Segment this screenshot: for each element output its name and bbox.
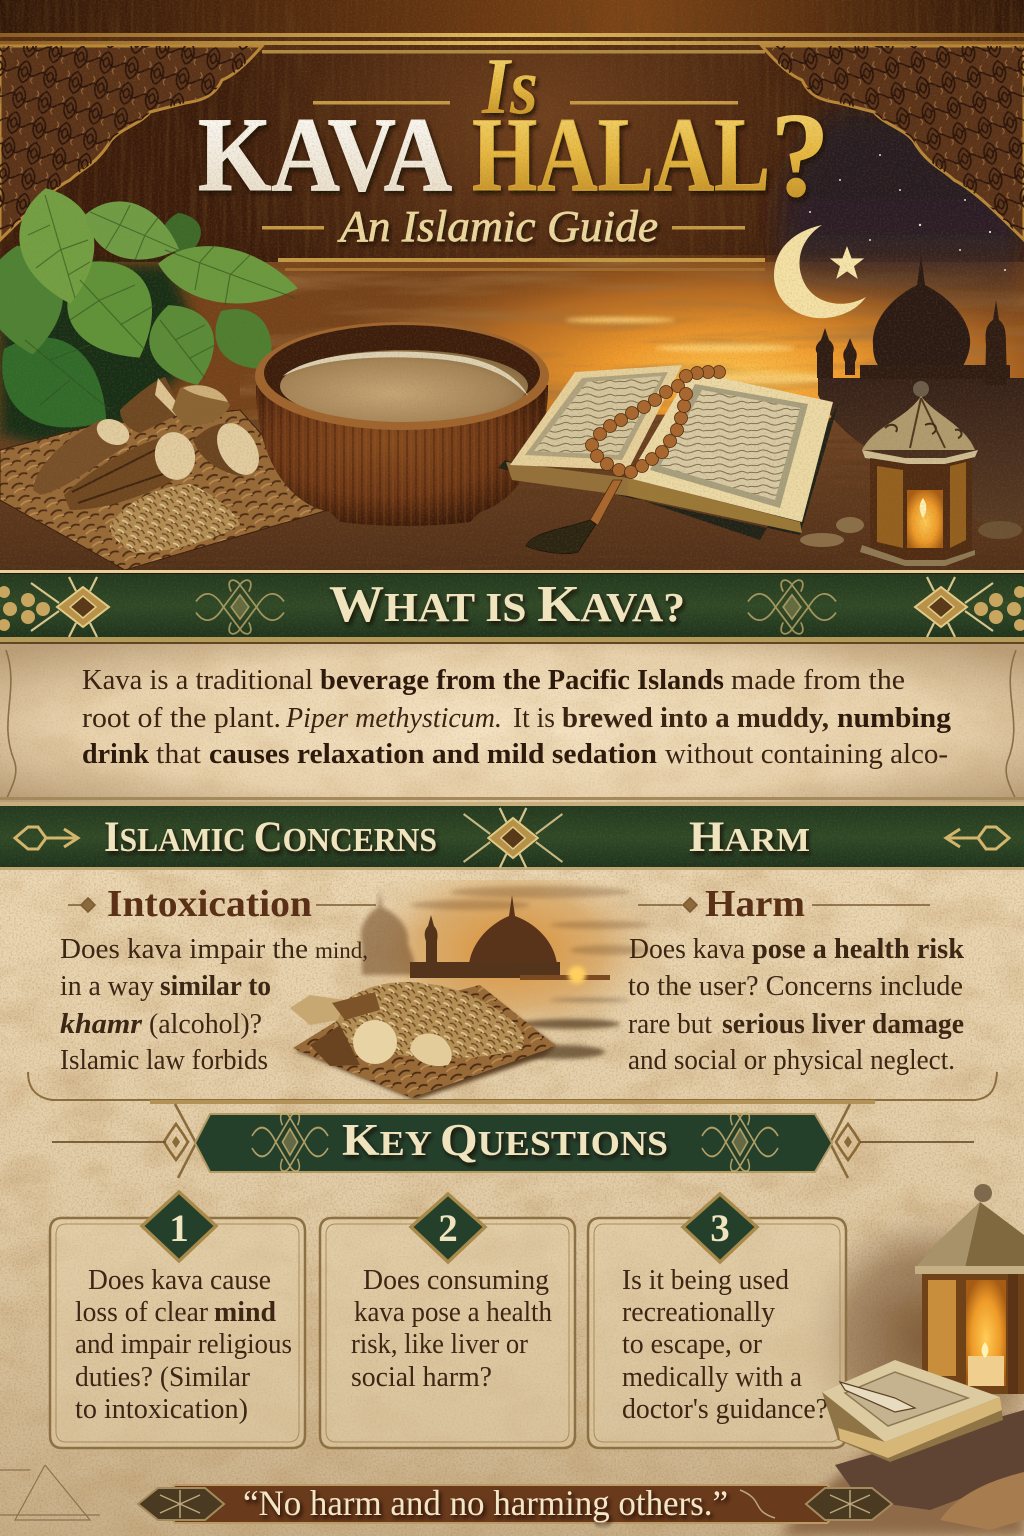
card 1 bbox=[50, 1192, 305, 1448]
heading: Harm: HARM bbox=[689, 814, 810, 861]
paper background: upper section bbox=[0, 640, 1024, 810]
text block: what is kava: It is bbox=[513, 702, 555, 734]
number badge bbox=[683, 1194, 757, 1262]
corner sketch bbox=[0, 1465, 100, 1520]
wood grain bbox=[0, 0, 1024, 264]
text: harm: rare but bbox=[628, 1009, 712, 1040]
woven mat bbox=[0, 410, 328, 570]
open book bbox=[498, 365, 838, 540]
gold frame lines bbox=[0, 33, 1024, 271]
text block: what is kava bbox=[82, 664, 952, 770]
heading: WHAT IS KAVA? bbox=[329, 576, 685, 633]
kava roots bbox=[33, 377, 268, 510]
card text: Does kava cause bbox=[88, 1265, 271, 1296]
root 1 bbox=[33, 420, 128, 495]
kava bowl bbox=[255, 322, 549, 526]
text block: what is kava: root of the plant. bbox=[82, 702, 281, 734]
text: intoxication: (alcohol)? bbox=[149, 1009, 262, 1040]
arch ornament: right bbox=[762, 46, 1024, 240]
text: intoxication: Islamic law forbids bbox=[60, 1045, 268, 1076]
text block: what is kava: made from the bbox=[731, 664, 905, 696]
ornaments bbox=[15, 808, 1009, 868]
subtitle: An Islamic Guide bbox=[337, 202, 658, 251]
number badge bbox=[411, 1194, 485, 1262]
prayer beads bbox=[526, 366, 726, 554]
arch ornament: left bbox=[0, 46, 262, 240]
paper background: lower section bbox=[0, 866, 1024, 1536]
card text: and impair religious bbox=[75, 1329, 292, 1360]
ornaments bbox=[164, 1113, 860, 1171]
card text: duties? (Similar bbox=[75, 1362, 251, 1393]
number badge bbox=[142, 1192, 216, 1261]
rug and ground bbox=[780, 1410, 1024, 1536]
star bbox=[830, 246, 864, 279]
text block: what is kava: drink bbox=[82, 738, 150, 770]
card text: to intoxication) bbox=[75, 1394, 248, 1425]
card text: medically with a bbox=[622, 1362, 803, 1393]
crescent moon bbox=[774, 225, 866, 318]
text block: what is kava: causes relaxation and mild sedation bbox=[209, 738, 657, 770]
text: intoxication: Does kava impair the bbox=[60, 934, 308, 965]
panel frame bbox=[28, 1072, 997, 1100]
leaves bbox=[0, 181, 303, 455]
text block: what is kava: beverage from the Pacific Islands bbox=[320, 664, 724, 696]
central title panel bbox=[0, 52, 1024, 264]
smoke behind lantern bbox=[780, 1210, 1024, 1470]
heading: Islamic Concerns: ISLAMIC CONCERNS bbox=[104, 814, 437, 861]
card text: to escape, or bbox=[622, 1329, 763, 1360]
ornaments bbox=[0, 577, 1024, 637]
card 3 bbox=[588, 1194, 846, 1448]
root 2 bbox=[120, 377, 183, 433]
card text: risk, like liver or bbox=[351, 1329, 529, 1360]
card text: Does consuming bbox=[363, 1265, 549, 1296]
heading: KEY QUESTIONS bbox=[342, 1115, 668, 1165]
text: intoxication: mind, bbox=[315, 938, 368, 963]
panel: concerns bbox=[28, 880, 997, 1104]
bottom right still life bbox=[780, 1184, 1024, 1536]
number badge: 2 bbox=[438, 1207, 458, 1250]
card text bbox=[75, 1265, 292, 1425]
card text: loss of clear bbox=[75, 1297, 209, 1328]
text block: what is kava: Kava is a traditional bbox=[82, 664, 313, 696]
quote text: “No harm and no harming others.” bbox=[243, 1483, 728, 1523]
title: KAVA bbox=[198, 96, 452, 213]
card text: doctor's guidance? bbox=[622, 1394, 828, 1425]
heading rules bbox=[68, 898, 930, 912]
night sky with stars bbox=[780, 110, 1024, 330]
text: harm bbox=[628, 934, 964, 1076]
banner: Key Questions bbox=[52, 1104, 974, 1178]
text: intoxication: in a way bbox=[60, 971, 155, 1002]
card text bbox=[351, 1265, 552, 1393]
ribbon: quote bbox=[138, 1483, 892, 1523]
number badge: 3 bbox=[710, 1207, 730, 1250]
text: harm: pose a health risk bbox=[752, 934, 964, 965]
text block: what is kava: that bbox=[156, 738, 201, 770]
card text: kava pose a health bbox=[354, 1297, 552, 1328]
root 4 bbox=[172, 385, 230, 426]
title side rules bbox=[262, 101, 745, 230]
title bbox=[198, 43, 830, 223]
hero illustration bbox=[0, 0, 1024, 572]
number badge: 1 bbox=[169, 1207, 189, 1250]
banner: Islamic Concerns / Harm bbox=[0, 797, 1024, 870]
text block: what is kava: brewed into a muddy, bbox=[562, 702, 829, 734]
banner: What is Kava bbox=[0, 570, 1024, 644]
table bbox=[0, 415, 1024, 572]
text block: what is kava: Piper methysticum. bbox=[285, 702, 502, 734]
lantern bbox=[860, 381, 978, 566]
text: harm: Does kava bbox=[629, 934, 745, 965]
title: HALAL bbox=[472, 96, 770, 213]
text: intoxication: khamr bbox=[60, 1009, 143, 1040]
heading: Intoxication: Intoxication bbox=[107, 883, 312, 925]
kava on mat bbox=[290, 982, 556, 1100]
root 3 bbox=[64, 435, 190, 510]
lantern bbox=[915, 1184, 1024, 1394]
card text: recreationally bbox=[622, 1297, 775, 1328]
text: harm: to the user? Concerns include bbox=[628, 971, 963, 1002]
text: harm: serious liver damage bbox=[722, 1009, 964, 1040]
title: Is bbox=[481, 43, 538, 131]
card 2 bbox=[320, 1194, 575, 1448]
side rules bbox=[52, 1141, 974, 1143]
kava powder bbox=[110, 484, 240, 553]
top wood band bbox=[0, 0, 1024, 34]
text block: what is kava: numbing bbox=[837, 702, 952, 734]
text block: what is kava: without containing alco- bbox=[665, 738, 948, 770]
text: intoxication bbox=[60, 934, 368, 1076]
root 5 bbox=[193, 423, 260, 476]
card text bbox=[622, 1265, 828, 1425]
closed book bbox=[822, 1360, 1003, 1462]
card text: mind bbox=[214, 1297, 276, 1328]
heading: Harm: Harm bbox=[705, 883, 805, 925]
quote ornaments bbox=[160, 1490, 870, 1518]
card text: social harm? bbox=[351, 1362, 492, 1393]
text: intoxication: similar to bbox=[160, 971, 271, 1002]
sunset sky bbox=[0, 255, 1024, 430]
center scene: mosque at sunset bbox=[330, 880, 670, 1080]
title: ? bbox=[770, 88, 830, 223]
text: harm: and social or physical neglect. bbox=[628, 1045, 955, 1076]
table debris bbox=[800, 517, 1022, 547]
mosque silhouette bbox=[816, 255, 1024, 529]
card text: Is it being used bbox=[622, 1265, 789, 1296]
